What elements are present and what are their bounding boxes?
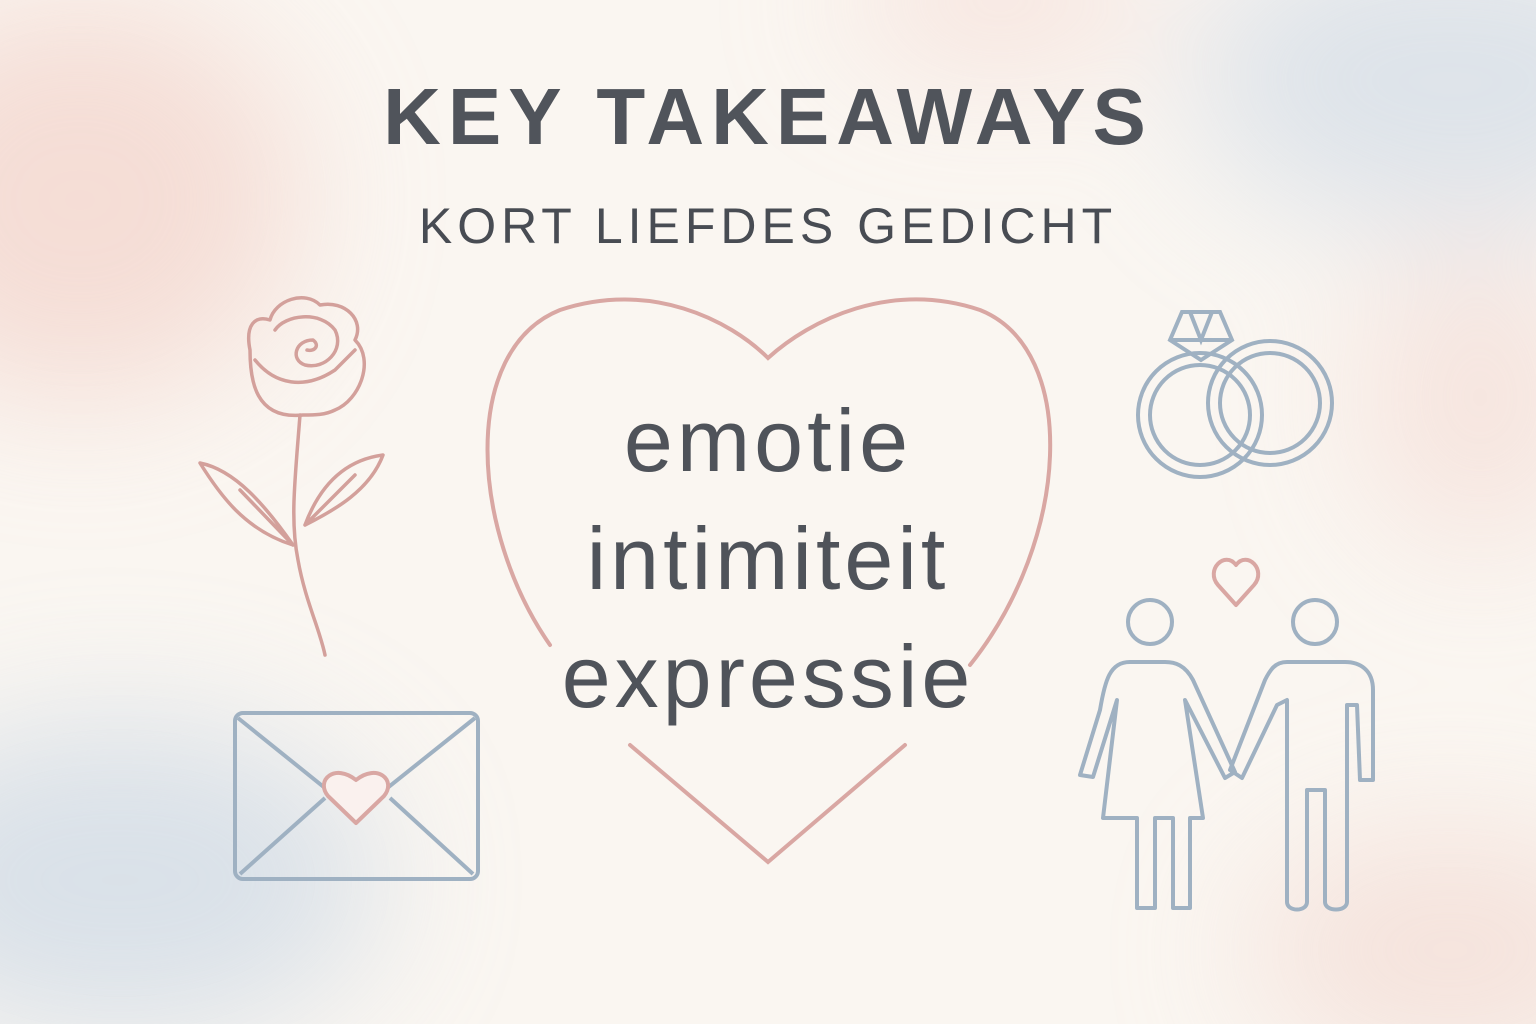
title: KEY TAKEAWAYS — [383, 72, 1153, 161]
subtitle: KORT LIEFDES GEDICHT — [419, 198, 1117, 254]
words: emotie — [624, 391, 912, 490]
icon: rings — [1136, 310, 1334, 479]
icon: couple holding hands — [1078, 558, 1375, 912]
heart outline with words — [486, 297, 1052, 864]
words — [562, 391, 974, 726]
icon: rose — [198, 296, 385, 657]
icon: envelope — [233, 711, 480, 881]
words: intimiteit — [587, 509, 949, 608]
words: expressie — [562, 627, 974, 726]
